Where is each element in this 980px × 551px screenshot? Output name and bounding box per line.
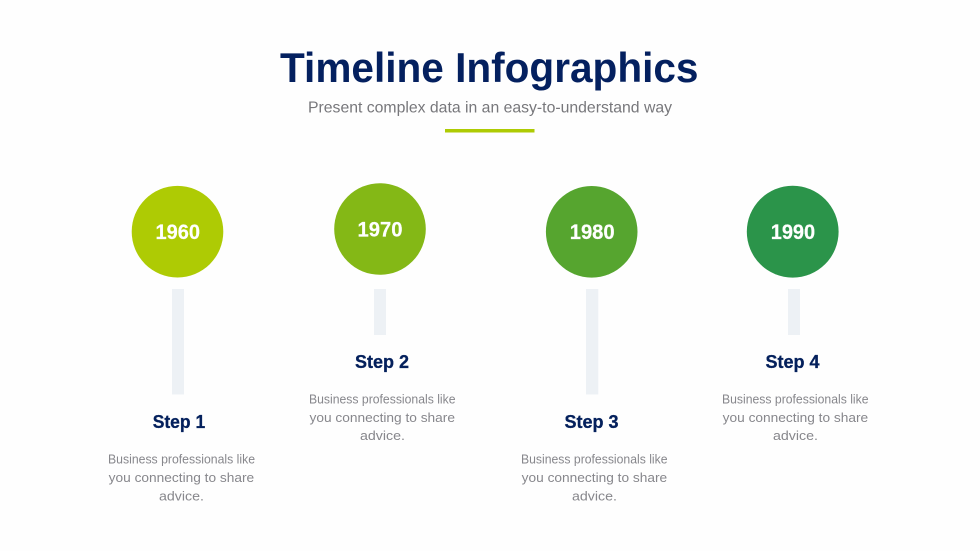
panel: step 4: [722, 186, 868, 443]
connector bar 3: [586, 289, 598, 394]
panel: step 2: [309, 183, 456, 443]
subtitle: Present complex data in an easy-to-understand way: [308, 100, 672, 116]
year circle 1980: [546, 186, 638, 278]
connector bar 1: [172, 289, 184, 394]
step 2 description: [309, 391, 456, 443]
title: Timeline Infographics: [280, 44, 698, 91]
panel: step 1: [108, 186, 255, 503]
year circle 1990: [747, 186, 839, 278]
connector bar 4: [788, 289, 800, 335]
step 2 description: advice.: [360, 428, 405, 443]
step 1 description: advice.: [159, 488, 204, 503]
step 3 description: [521, 451, 668, 503]
panel: step 3: [521, 186, 668, 503]
step 4 description: Business professionals like: [722, 391, 868, 406]
step 3 heading: Step 3: [564, 411, 618, 432]
step 4 description: you connecting to share: [723, 410, 868, 425]
year circle 1990: 1990: [771, 221, 815, 244]
year circle 1960: 1960: [156, 221, 200, 244]
step 3 description: Business professionals like: [521, 451, 668, 466]
year circle 1980: 1980: [570, 221, 615, 244]
step 4 heading: Step 4: [766, 351, 820, 372]
step 3 description: you connecting to share: [522, 470, 667, 485]
step 4 description: [722, 391, 868, 443]
year circle 1970: 1970: [358, 219, 402, 242]
step 1 description: you connecting to share: [109, 470, 254, 485]
step 2 heading: Step 2: [355, 351, 409, 372]
year circle 1960: [132, 186, 223, 278]
step 3 description: advice.: [572, 488, 617, 503]
title accent line: [445, 129, 534, 132]
step 2 description: Business professionals like: [309, 391, 456, 406]
year circle 1970: [334, 183, 426, 275]
step 2 description: you connecting to share: [310, 410, 455, 425]
step 1 description: [108, 451, 255, 503]
step 1 description: Business professionals like: [108, 451, 255, 466]
step 4 description: advice.: [773, 428, 818, 443]
connector bar 2: [374, 289, 386, 335]
step 1 heading: Step 1: [153, 411, 205, 432]
